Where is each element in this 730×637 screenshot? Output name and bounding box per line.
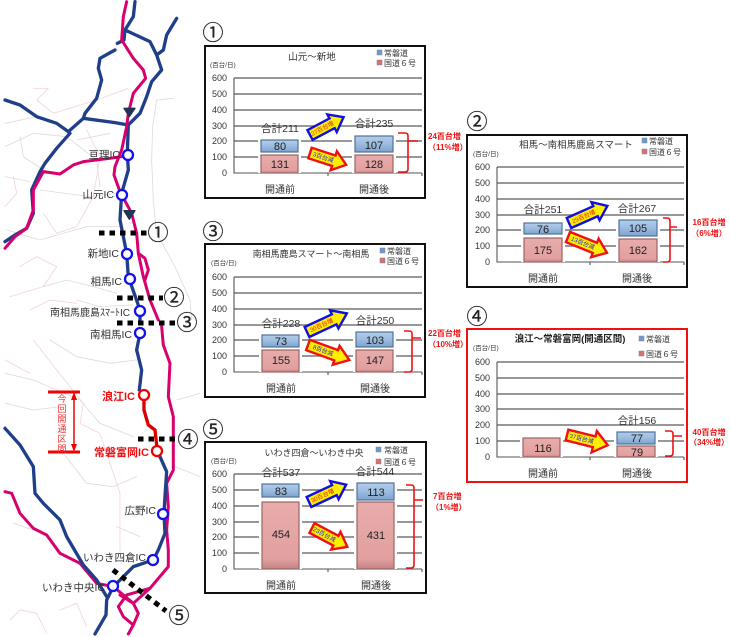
legend <box>639 334 678 359</box>
chart title: 山元～新地 <box>288 51 336 63</box>
total change bracket <box>406 485 423 568</box>
map: road network <box>5 2 200 634</box>
y axis and grid: 200 <box>212 335 227 345</box>
y axis and grid <box>212 73 422 178</box>
map: interchange labels: 亘理IC <box>88 149 120 161</box>
bars after: 105 <box>629 223 647 235</box>
panel 1: Yamamoto to Shinchi: (百台/日) <box>210 60 236 69</box>
y axis and grid: 300 <box>212 320 227 330</box>
map: opened section bracket: 通 <box>57 424 67 434</box>
bars before: 131 <box>271 159 289 171</box>
bars after <box>352 134 396 173</box>
map: interchange labels: いわき四倉IC <box>83 552 146 564</box>
map: section markers: ② <box>164 287 184 310</box>
panel 2: Soma to Minamisoma-Kashima Smart: 合計267 <box>618 202 656 215</box>
arrow: expressway increase: 30百台増 <box>310 487 335 505</box>
y axis and grid: 300 <box>212 517 227 527</box>
bars after: 103 <box>366 335 384 347</box>
panel 5: Iwaki-Yotsukura to Iwaki-Chuo: 開通前 <box>266 579 296 592</box>
map: section markers: ④ <box>178 429 198 452</box>
background local roads <box>5 88 192 320</box>
legend <box>642 136 681 157</box>
legend: 国道６号 <box>646 349 678 359</box>
panel 1: Yamamoto to Shinchi: 開通後 <box>359 183 389 196</box>
map: interchange labels: 相馬IC <box>90 275 122 288</box>
y axis and grid: 600 <box>212 272 227 282</box>
y axis and grid <box>212 272 422 377</box>
y axis and grid: 300 <box>475 404 490 414</box>
map: interchange labels: 浪江IC <box>102 389 135 403</box>
panel 2: Soma to Minamisoma-Kashima Smart <box>466 111 727 287</box>
legend: 国道６号 <box>384 457 416 467</box>
y axis and grid: 0 <box>222 564 227 574</box>
y axis and grid: 100 <box>475 436 490 446</box>
bars before <box>521 221 565 262</box>
bar before: 116 <box>534 443 552 455</box>
y axis and grid: 500 <box>212 288 227 298</box>
total change label: 40百台増 <box>693 427 725 437</box>
panel 2: Soma to Minamisoma-Kashima Smart: 開通後 <box>622 272 652 285</box>
map: interchange labels: 山元IC <box>82 189 114 201</box>
bars before: 76 <box>537 224 549 236</box>
y axis and grid: 500 <box>475 178 490 188</box>
legend: 常磐道 <box>646 334 670 344</box>
bars after: 77 <box>631 433 643 445</box>
total change bracket <box>404 331 421 372</box>
chart title: 浪江～常磐富岡(開通区間) <box>515 333 625 345</box>
bars before: 155 <box>272 355 290 367</box>
bars after <box>616 218 660 262</box>
arrow: route 6 decrease: 3百台減 <box>312 150 335 164</box>
panel 3: Minamisoma-Kashima Smart to Minamisoma: 開通後 <box>360 382 390 395</box>
arrow: route 6 decrease: 13百台減 <box>570 235 596 251</box>
y axis and grid: 300 <box>475 210 490 220</box>
y axis and grid: 200 <box>475 225 490 235</box>
bars after: 79 <box>631 447 643 459</box>
chart title: いわき四倉～いわき中央 <box>264 447 364 458</box>
y axis and grid: 400 <box>475 389 490 399</box>
map: section markers: ⑤ <box>168 605 190 628</box>
arrow: expressway increase: 29百台増 <box>571 208 597 225</box>
y axis and grid: 100 <box>475 241 490 251</box>
panel 4: Namie to Joban-Tomioka, opened section: (百台/日) <box>473 343 499 352</box>
arrow: route 6 decrease <box>305 336 353 369</box>
map: section markers: ③ <box>176 312 198 335</box>
bars after: 128 <box>365 159 383 171</box>
legend: 常磐道 <box>649 136 673 146</box>
map: interchange labels: 南相馬鹿島ｽﾏｰﾄIC <box>50 306 130 319</box>
bars before: 73 <box>275 336 287 348</box>
bars after: 107 <box>365 140 383 152</box>
arrow: route 6 decrease <box>307 143 349 174</box>
total change label: （10%増） <box>428 339 468 349</box>
panel 5: Iwaki-Yotsukura to Iwaki-Chuo: 合計544 <box>356 465 394 478</box>
panel 3: Minamisoma-Kashima Smart to Minamisoma: 合計250 <box>356 314 394 327</box>
panel 4: Namie to Joban-Tomioka, opened section: 開通後 <box>622 467 652 480</box>
arrow: route 6 decrease: 23百台減 <box>312 525 337 544</box>
y axis and grid: 500 <box>212 485 227 495</box>
panel number 3: ③ <box>202 221 224 244</box>
arrow: route 6 decrease <box>564 228 611 262</box>
map: interchange labels: 南相馬IC <box>90 328 132 341</box>
bars before <box>259 333 302 372</box>
bars after <box>614 430 658 459</box>
legend: 常磐道 <box>387 246 411 256</box>
total change label: （34%増） <box>689 437 729 447</box>
total change label: （1%増） <box>431 502 467 512</box>
bars after <box>354 481 397 569</box>
total change label: 7百台増 <box>433 491 461 501</box>
total change label: 22百台増 <box>428 328 461 338</box>
y axis and grid: 500 <box>212 89 227 99</box>
legend <box>377 48 416 68</box>
panel 5: Iwaki-Yotsukura to Iwaki-Chuo <box>202 419 467 593</box>
bars after: 113 <box>367 487 385 499</box>
panel number 1: ① <box>202 22 224 45</box>
panel 3: Minamisoma-Kashima Smart to Minamisoma <box>202 221 468 397</box>
panel 1: Yamamoto to Shinchi <box>202 22 468 198</box>
bars after <box>353 330 396 372</box>
map: opened section bracket: 開 <box>57 414 67 424</box>
y axis and grid: 300 <box>212 121 227 131</box>
y axis and grid: 400 <box>212 105 227 115</box>
y axis and grid: 0 <box>222 367 227 377</box>
y axis and grid <box>475 162 684 267</box>
map: interchange labels: 常磐富岡IC <box>94 445 149 459</box>
y axis and grid <box>212 469 422 574</box>
legend: 国道６号 <box>649 147 681 157</box>
panel 5: Iwaki-Yotsukura to Iwaki-Chuo: (百台/日) <box>211 456 237 465</box>
y axis and grid: 100 <box>212 548 227 558</box>
panel 2: Soma to Minamisoma-Kashima Smart: (百台/日) <box>473 149 499 158</box>
y axis and grid: 600 <box>475 357 490 367</box>
legend: 国道６号 <box>384 58 416 68</box>
y axis and grid: 400 <box>212 501 227 511</box>
legend <box>380 246 419 266</box>
arrow: route 6 decrease: 8百台減 <box>312 343 334 358</box>
y axis and grid: 200 <box>475 420 490 430</box>
panel 4: Namie to Joban-Tomioka, opened section: 合計156 <box>618 414 656 427</box>
legend <box>376 445 416 467</box>
panel 5: Iwaki-Yotsukura to Iwaki-Chuo: 開通後 <box>361 579 391 592</box>
panel number 4: ④ <box>466 306 488 329</box>
panel 4: Namie to Joban-Tomioka, opened section: 開通前 <box>528 467 558 480</box>
legend: 国道６号 <box>387 256 419 266</box>
map: interchange labels: いわき中央IC <box>42 581 105 594</box>
y axis and grid: 100 <box>212 152 227 162</box>
bars before: 83 <box>275 486 287 498</box>
y axis and grid: 500 <box>475 373 490 383</box>
arrow: expressway increase: 30百台増 <box>309 316 334 334</box>
total change label: （11%増） <box>428 142 468 152</box>
map: opened section bracket: 今 <box>57 393 67 404</box>
arrow: expressway increase: 27百台増 <box>310 119 335 138</box>
total change bracket <box>398 133 418 172</box>
panel 3: Minamisoma-Kashima Smart to Minamisoma: (百台/日) <box>211 258 237 267</box>
bars after: 162 <box>629 245 647 257</box>
y axis and grid: 100 <box>212 351 227 361</box>
bars before: 175 <box>534 245 552 257</box>
bars before <box>258 138 301 173</box>
y axis and grid: 600 <box>212 73 227 83</box>
total change bracket <box>665 431 682 456</box>
bars after: 431 <box>367 530 385 542</box>
y axis and grid: 400 <box>475 194 490 204</box>
panel 4: Namie to Joban-Tomioka, opened section <box>466 306 729 482</box>
bars before: 454 <box>272 529 290 541</box>
arrow: route 6 decrease <box>307 519 352 556</box>
y axis and grid: 400 <box>212 304 227 314</box>
y axis and grid: 600 <box>475 162 490 172</box>
chart title: 南相馬鹿島スマート～南相馬 <box>253 248 369 259</box>
map: interchange labels <box>42 149 156 594</box>
expressways and national route, north section <box>5 2 177 320</box>
arrow: route 6 decrease: 37百台減 <box>569 432 594 445</box>
y axis and grid: 0 <box>485 257 490 267</box>
legend: 常磐道 <box>384 48 408 58</box>
bars before: 80 <box>274 141 286 153</box>
panel 3: Minamisoma-Kashima Smart to Minamisoma: 開通前 <box>266 382 296 395</box>
map: section markers: ① <box>148 222 168 245</box>
y axis and grid: 200 <box>212 532 227 542</box>
map: opened section bracket: 回 <box>57 404 67 414</box>
arrow: expressway increase <box>303 304 351 341</box>
panel 1: Yamamoto to Shinchi: 合計235 <box>355 117 393 130</box>
y axis and grid <box>475 357 684 462</box>
map: opened section bracket: 間 <box>57 444 67 454</box>
panel 3: Minamisoma-Kashima Smart to Minamisoma: 合計228 <box>262 317 300 330</box>
total change label: 16百台増 <box>693 217 725 227</box>
panel number 2: ② <box>466 111 488 134</box>
map: interchange markers <box>108 150 168 591</box>
total change label: 24百台増 <box>428 131 461 141</box>
bar before <box>520 436 563 457</box>
map: opened section bracket: 区 <box>57 434 67 444</box>
y axis and grid: 200 <box>212 136 227 146</box>
map: interchange labels: 広野IC <box>124 505 156 517</box>
y axis and grid: 0 <box>485 452 490 462</box>
bars before <box>259 482 302 569</box>
y axis and grid: 0 <box>222 168 227 178</box>
panel number 5: ⑤ <box>202 419 224 442</box>
panel 1: Yamamoto to Shinchi: 合計211 <box>261 122 299 135</box>
bars after: 147 <box>366 355 384 367</box>
total change label: （6%増） <box>691 228 727 238</box>
total change bracket <box>663 218 677 262</box>
y axis and grid: 600 <box>212 469 227 479</box>
map: interchange labels: 新地IC <box>88 247 119 260</box>
arrow: expressway increase <box>305 108 348 144</box>
panel 5: Iwaki-Yotsukura to Iwaki-Chuo: 合計537 <box>262 466 300 479</box>
arrow: route 6 decrease <box>564 424 610 456</box>
map: opened section bracket <box>48 392 80 454</box>
expressways and national route, south section <box>5 327 173 634</box>
legend: 常磐道 <box>384 445 408 455</box>
panel 1: Yamamoto to Shinchi: 開通前 <box>265 183 295 196</box>
panel 2: Soma to Minamisoma-Kashima Smart: 合計251 <box>524 203 562 216</box>
chart title: 相馬～南相馬鹿島スマート <box>519 139 633 151</box>
arrow: expressway increase <box>305 476 350 511</box>
panel 2: Soma to Minamisoma-Kashima Smart: 開通前 <box>528 272 558 285</box>
arrow: expressway increase <box>565 197 611 232</box>
map: section markers <box>99 222 198 628</box>
